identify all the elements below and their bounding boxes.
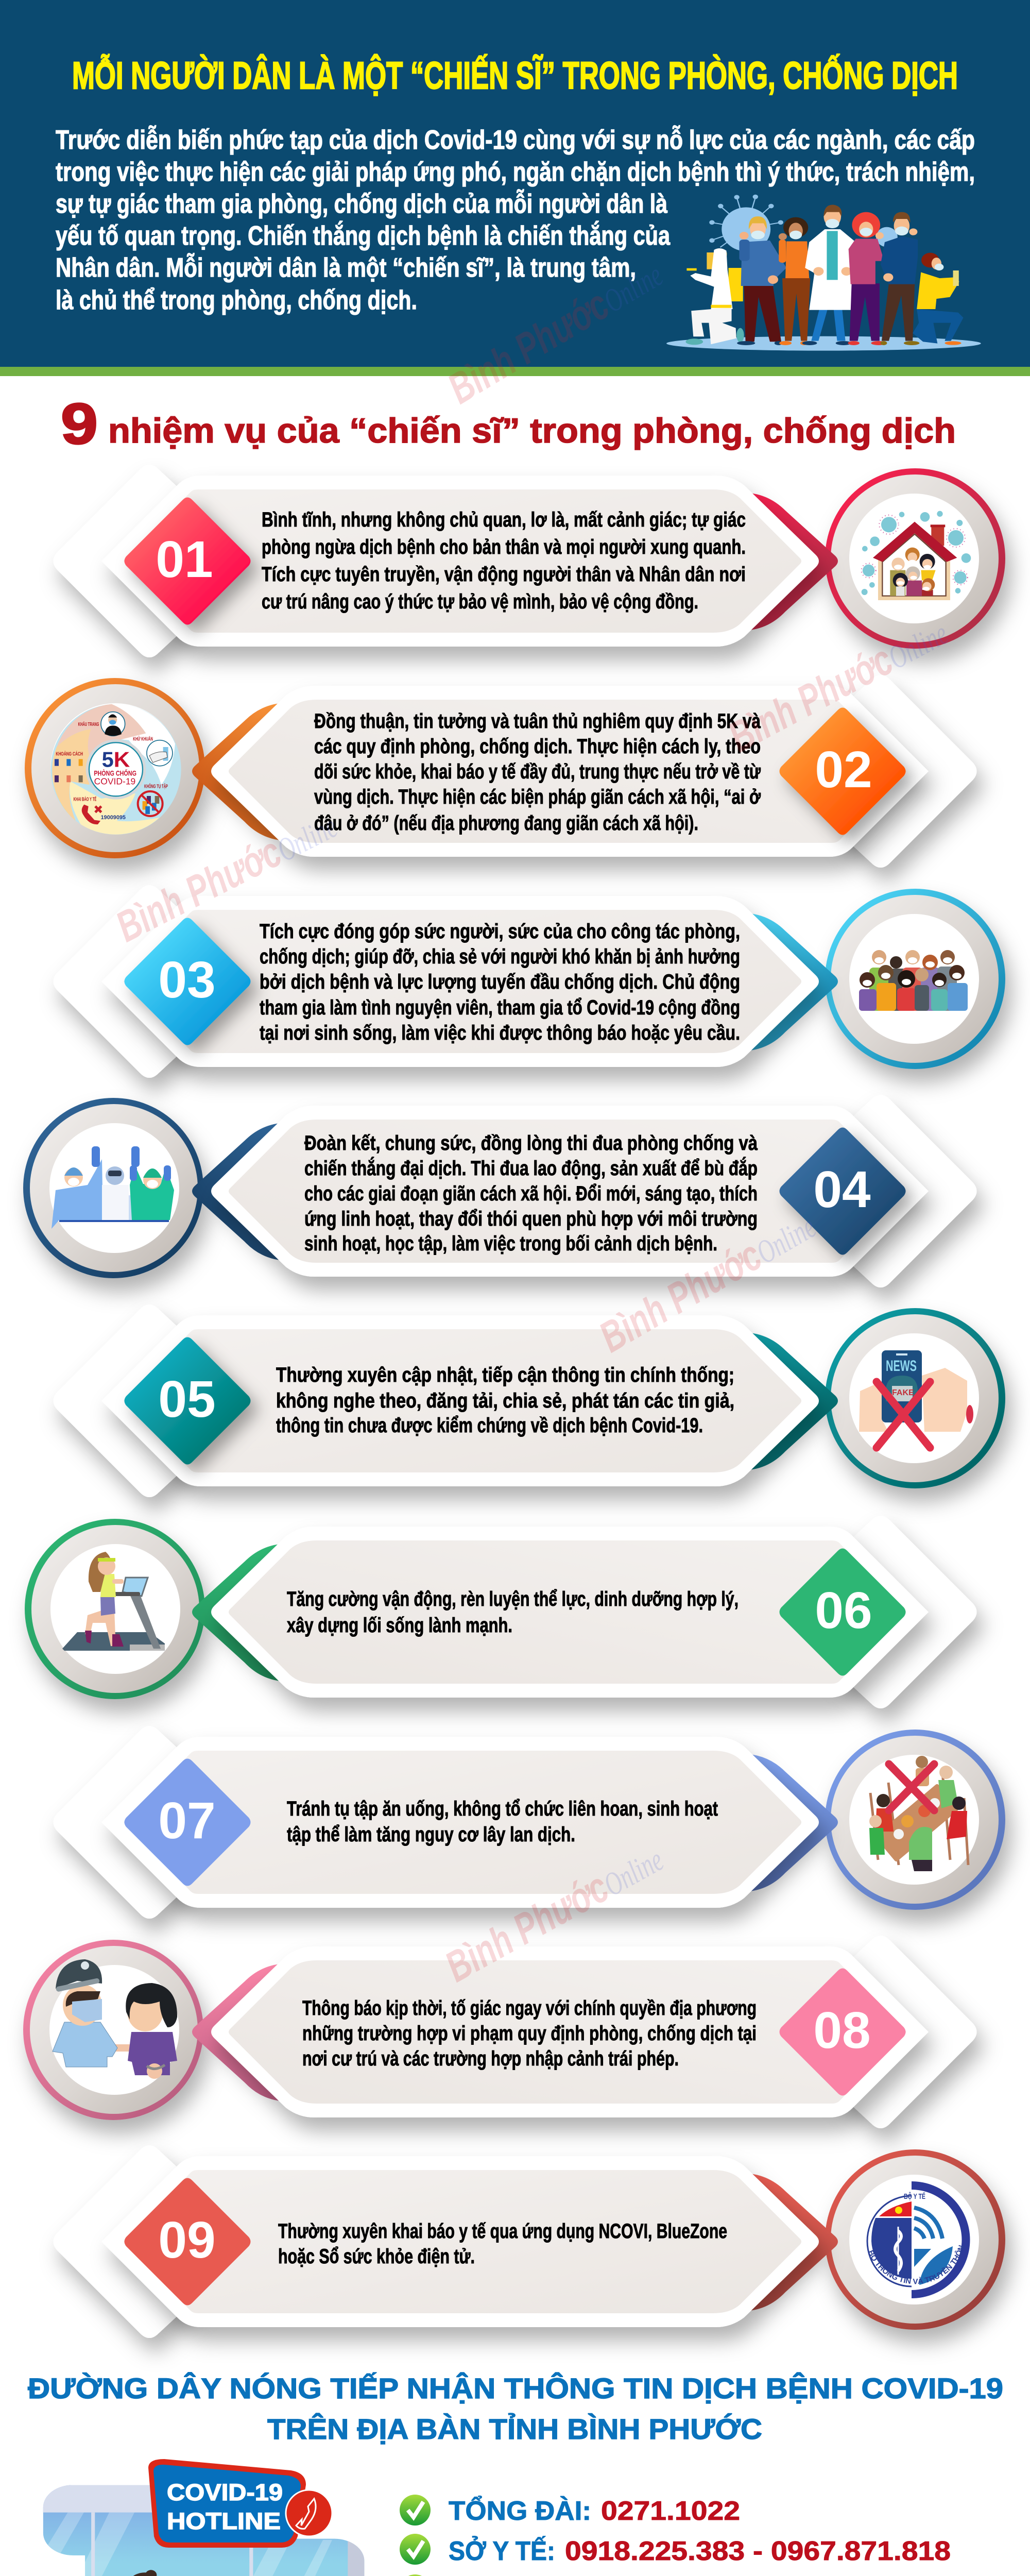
text 01 — [262, 509, 746, 613]
watermarks: Online — [271, 808, 343, 869]
text 09 — [278, 2220, 727, 2268]
text 05: không nghe theo, đăng tải, chia sẻ, phát tán các tin giả, — [276, 1389, 734, 1412]
watermarks: Online — [597, 257, 669, 319]
row: so y te: SỞ Y TẾ: — [449, 2536, 555, 2566]
panel: task 05 — [54, 1304, 1005, 1497]
icon: 5K diagram: PHÒNG CHỐNG — [94, 768, 136, 777]
icon: 5K diagram: KHAI BÁO Y TẾ — [74, 795, 97, 802]
text 08 — [302, 1997, 757, 2070]
text 05: Thường xuyên cập nhật, tiếp cận thông tin chính thống; — [276, 1364, 734, 1386]
watermarks: Online — [750, 1208, 822, 1271]
text 03: tham gia làm tình nguyện viên, tham gia tổ Covid-19 cộng đồng — [260, 996, 740, 1019]
text 04: sinh hoạt, học tập, làm việc trong bối cảnh dịch bệnh. — [304, 1232, 717, 1255]
watermarks: Bình Phước — [720, 635, 900, 761]
section heading — [61, 392, 956, 456]
icon: ministry logo: BỘ Y TẾ — [904, 2192, 925, 2201]
icon: 5K diagram: KHOẢNG CÁCH — [56, 751, 83, 757]
text 02 — [314, 710, 761, 835]
text 04: ứng linh hoạt, thay đổi thói quen phù hợp với môi trường — [304, 1208, 758, 1230]
text 09: Thường xuyên khai báo y tế qua ứng dụng NCOVI, BlueZone — [278, 2220, 727, 2243]
number 09: 09 — [158, 2211, 216, 2269]
intro text: sự tự giác tham gia phòng, chống dịch của mỗi người dân là — [56, 189, 668, 219]
text 04 — [304, 1132, 758, 1255]
text 06: Tăng cường vận động, rèn luyện thể lực, dinh dưỡng hợp lý, — [287, 1588, 739, 1611]
panel: task 08 — [23, 1936, 976, 2128]
icon: 5K diagram: 5 — [102, 747, 114, 771]
row: tong dai — [400, 2495, 740, 2526]
text 03: Tích cực đóng góp sức người, sức của cho công tác phòng, — [260, 920, 740, 943]
icon: 5K diagram: KHÔNG TỤ TẬP — [144, 783, 168, 789]
icon: police and offender — [53, 1959, 177, 2079]
icon: medical staff — [52, 1146, 174, 1229]
panel: task 01 — [54, 465, 1005, 657]
number 08: 08 — [813, 2002, 871, 2059]
text 01: Bình tĩnh, nhưng không chủ quan, lơ là, mất cảnh giác; tự giác — [262, 509, 746, 531]
watermarks: Online — [882, 615, 954, 676]
text 09: hoặc Sổ sức khỏe điện tử. — [278, 2245, 475, 2268]
icon: 5K diagram: K — [114, 747, 130, 771]
hotline heading — [28, 2372, 1003, 2445]
number 07: 07 — [158, 1792, 216, 1850]
section heading: 9 — [61, 392, 98, 456]
text 08: những trường hợp vi phạm quy định phòng, chống dịch tại — [302, 2022, 757, 2045]
number 01: 01 — [156, 531, 213, 588]
text 07 — [287, 1798, 718, 1846]
text 06: xây dựng lối sống lành mạnh. — [287, 1614, 512, 1637]
row: ttks benh tat — [400, 2574, 839, 2576]
icon: 5K diagram: KHỬ KHUẨN — [133, 736, 153, 742]
icon: 5K diagram — [50, 704, 181, 835]
text 06 — [287, 1588, 739, 1637]
text 02: Đồng thuận, tin tưởng và tuân thủ nghiêm quy định 5K và — [314, 710, 761, 733]
text 05 — [276, 1364, 734, 1437]
badge: covid-19 hotline: COVID-19 — [167, 2479, 283, 2505]
text 02: dõi sức khỏe, khai báo y tế đầy đủ, trung thực nếu trở về từ — [314, 760, 761, 783]
watermarks — [108, 248, 955, 2576]
text 03 — [260, 920, 740, 1044]
watermarks: Bình Phước — [437, 1862, 616, 1991]
row: tong dai: TỔNG ĐÀI: — [449, 2496, 591, 2526]
illustration: people with masks — [666, 195, 981, 351]
icon: crossed out party table — [869, 1756, 968, 1871]
intro text: là chủ thể trong phòng, chống dịch. — [56, 285, 417, 315]
icon: family in house with viruses — [862, 511, 971, 600]
hotline heading: TRÊN ĐỊA BÀN TỈNH BÌNH PHƯỚC — [267, 2413, 762, 2445]
text 04: Đoàn kết, chung sức, đồng lòng thi đua phòng chống và — [304, 1132, 758, 1155]
icon: crowd with masks — [859, 950, 968, 1011]
text 07: Tránh tụ tập ăn uống, không tổ chức liên hoan, sinh hoạt — [287, 1798, 718, 1820]
icon: 5K diagram: 19009095 — [101, 815, 126, 821]
number 06: 06 — [815, 1582, 872, 1639]
contact list — [400, 2495, 997, 2576]
panel: task 04 — [23, 1095, 976, 1287]
icon: fake news phone crossed out: NEWS — [886, 1358, 917, 1375]
text 02: vùng dịch. Thực hiện các biện pháp giãn cách xã hội, “ai ở — [314, 786, 761, 808]
row: tong dai: 0271.1022 — [601, 2496, 740, 2526]
text 03: chống dịch; giúp đỡ, chia sẻ với người khó khăn bị ảnh hưởng — [260, 945, 740, 968]
panel: task 02 — [25, 675, 976, 868]
icon: 5K diagram: COVID-19 — [94, 776, 135, 786]
text 01: phòng ngừa dịch bệnh cho bản thân và mọi người xung quanh. — [262, 536, 746, 558]
watermarks: Bình Phước — [440, 280, 617, 413]
text 05: thông tin chưa được kiểm chứng về dịch bệnh Covid-19. — [276, 1414, 703, 1437]
text 02: các quy định phòng, chống dịch. Thực hiện cách ly, theo — [314, 735, 761, 758]
hotline heading: ĐƯỜNG DÂY NÓNG TIẾP NHẬN THÔNG TIN DỊCH BỆNH COVID-19 — [28, 2372, 1003, 2404]
icon: 5K diagram: KHẨU TRANG — [78, 721, 99, 727]
text 08: Thông báo kịp thời, tố giác ngay với chính quyền địa phương — [302, 1997, 757, 2020]
number 04: 04 — [813, 1161, 871, 1218]
icon: fake news phone crossed out — [859, 1350, 973, 1448]
intro text: Nhân dân. Mỗi người dân là một “chiến sĩ”, là trung tâm, — [56, 253, 636, 283]
number 03: 03 — [158, 951, 216, 1009]
header panel — [0, 0, 1030, 376]
text 04: cho các giai đoạn giãn cách xã hội. Đổi mới, sáng tạo, thích — [304, 1182, 758, 1205]
text 03: bởi dịch bệnh và lực lượng tuyến đầu chống dịch. Chủ động — [260, 971, 740, 993]
text 08: nơi cư trú và các trường hợp nhập cảnh trái phép. — [302, 2047, 679, 2070]
intro text: yếu tố quan trọng. Chiến thắng dịch bệnh là chiến thắng của — [56, 221, 671, 251]
text 01: Tích cực tuyên truyền, vận động người thân và Nhân dân nơi — [262, 563, 746, 586]
icon: ministry logo: BỘ THÔNG TIN VÀ TRUYỀN THÔNG — [869, 2245, 962, 2284]
badge: covid-19 hotline: HOTLINE — [167, 2508, 281, 2534]
text 01: cư trú nâng cao ý thức tự bảo vệ mình, bảo vệ cộng đồng. — [262, 590, 698, 613]
watermarks: Bình Phước — [591, 1231, 769, 1362]
icon: fake news phone crossed out: FAKE — [892, 1388, 914, 1397]
badge: covid-19 hotline — [148, 2459, 332, 2548]
text 04: chiến thắng đại dịch. Thi đua lao động, sản xuất để bù đắp — [304, 1156, 758, 1180]
panel: task 06 — [25, 1516, 976, 1708]
illustration: hotline operators — [43, 2459, 365, 2576]
text 03: tại nơi sinh sống, làm việc khi được thông báo hoặc yêu cầu. — [260, 1022, 740, 1044]
panel: task 03 — [54, 885, 1005, 1078]
row: so y te — [400, 2534, 951, 2566]
icon: girl on treadmill — [62, 1552, 165, 1651]
number 02: 02 — [815, 741, 872, 799]
watermarks: Bình Phước — [108, 827, 289, 951]
text 02: đâu ở đó” (nếu địa phương đang giãn cách xã hội). — [314, 812, 698, 835]
intro text — [56, 125, 975, 315]
row: so y te: 0918.225.383 - 0967.871.818 — [565, 2536, 951, 2566]
text 07: tập thể làm tăng nguy cơ lây lan dịch. — [287, 1823, 575, 1846]
section heading: nhiệm vụ của “chiến sĩ” trong phòng, chống dịch — [108, 411, 956, 450]
watermarks: Online — [597, 1841, 669, 1903]
number 05: 05 — [158, 1370, 216, 1428]
panel: task 07 — [54, 1726, 1005, 1919]
